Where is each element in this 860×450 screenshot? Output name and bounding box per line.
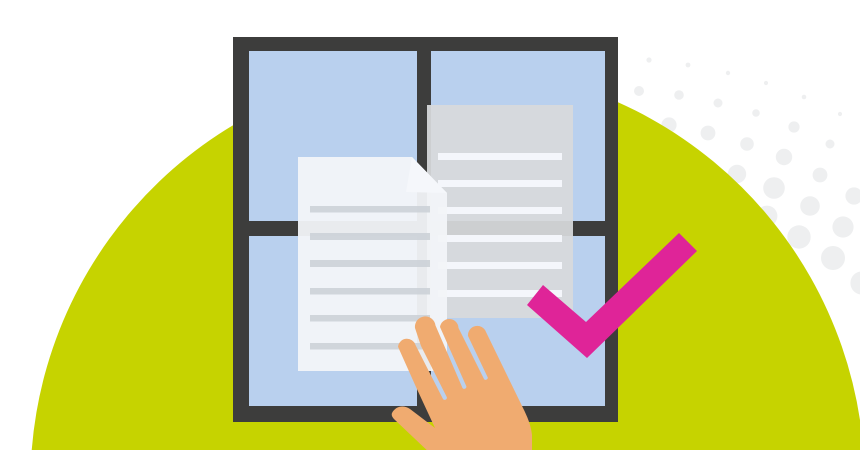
front document [298,157,447,371]
window frame [233,37,618,422]
window pane: bottom right [431,236,605,406]
window pane: bottom left [249,236,417,406]
icon: pink check mark [527,233,697,358]
text lines on grey sheet [438,153,562,297]
background dot pattern [634,57,860,295]
white sheet with folded corner [298,157,447,371]
folded corner [406,157,447,193]
grey sheet [427,105,573,318]
window pane: top left [249,51,417,221]
back document [427,105,573,318]
icon: hand [392,316,532,450]
window [233,37,618,422]
window pane: top right [431,51,605,221]
text lines on white sheet [310,206,430,350]
